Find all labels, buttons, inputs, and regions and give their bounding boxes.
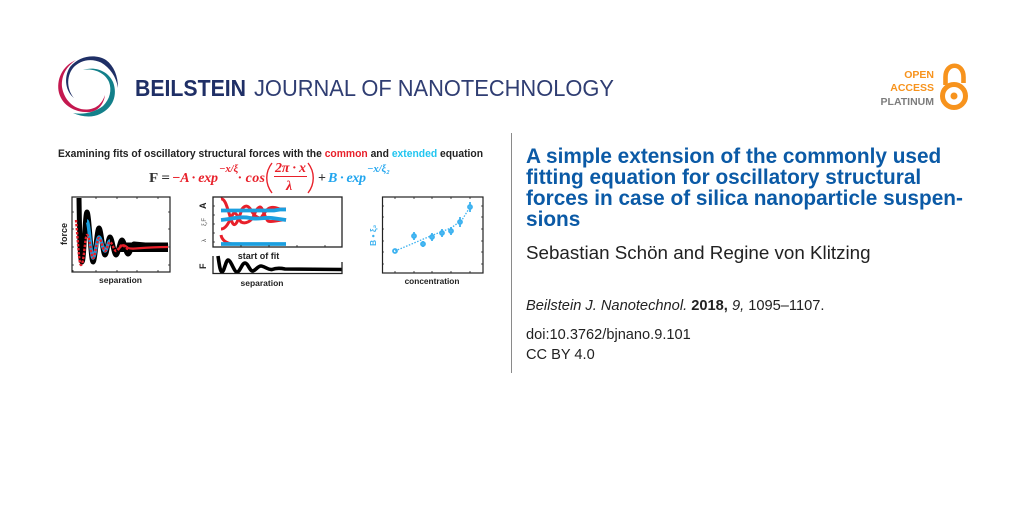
equation: 2π · x xyxy=(274,161,306,176)
chart: fit parameters vs start of fit: ξ,F xyxy=(202,218,208,226)
chart: fit parameters vs start of fit: λ xyxy=(202,239,208,242)
article title: sions xyxy=(526,208,580,231)
open access label xyxy=(881,69,934,108)
open access label: ACCESS xyxy=(890,82,934,94)
chart: force vs separation: force xyxy=(59,223,69,245)
chart: fit parameters vs start of fit: start of fit xyxy=(238,251,279,261)
doi: doi:10.3762/bjnano.9.101 xyxy=(526,327,691,343)
authors: Sebastian Schön and Regine von Klitzing xyxy=(526,242,871,263)
equation xyxy=(149,161,390,194)
article title xyxy=(526,145,963,231)
icon: open access padlock xyxy=(942,66,966,108)
equation: B · exp xyxy=(327,171,366,186)
article title: fitting equation for oscillatory structural xyxy=(526,166,921,189)
open access label: PLATINUM xyxy=(881,96,934,108)
chart: B·ξ2 vs concentration: concentration xyxy=(405,276,459,286)
icon: journal swirl logo xyxy=(58,56,118,117)
equation: · cos xyxy=(238,171,266,186)
equation: + xyxy=(318,171,326,186)
chart: fit parameters vs start of fit: separation xyxy=(240,278,284,288)
equation: F = xyxy=(149,171,170,186)
citation: Beilstein J. Nanotechnol. 2018, 9, 1095–1107. xyxy=(526,298,824,314)
equation: −A · exp xyxy=(172,171,218,186)
chart: B·ξ2 vs concentration xyxy=(368,197,483,286)
chart: fit parameters vs start of fit: F xyxy=(198,263,208,269)
graphic heading: Examining fits of oscillatory structural forces with the common and extended equation xyxy=(58,148,483,160)
journal name: JOURNAL OF NANOTECHNOLOGY xyxy=(254,75,614,101)
article title: forces in case of silica nanoparticle suspen- xyxy=(526,187,963,210)
chart: fit parameters vs start of fit xyxy=(198,197,342,288)
chart: force vs separation xyxy=(59,197,170,285)
journal name: BEILSTEIN xyxy=(135,75,246,101)
chart: B·ξ2 vs concentration: B • ξ₂ xyxy=(368,224,378,246)
open access label: OPEN xyxy=(904,69,934,81)
chart: fit parameters vs start of fit: A xyxy=(198,202,208,209)
equation: λ xyxy=(285,179,292,194)
divider xyxy=(511,133,512,373)
licence: CC BY 4.0 xyxy=(526,347,595,363)
article title: A simple extension of the commonly used xyxy=(526,145,941,168)
equation: −x/ξ xyxy=(219,164,239,175)
chart: force vs separation: separation xyxy=(99,275,142,285)
equation: −x/ξ₂ xyxy=(367,164,390,175)
